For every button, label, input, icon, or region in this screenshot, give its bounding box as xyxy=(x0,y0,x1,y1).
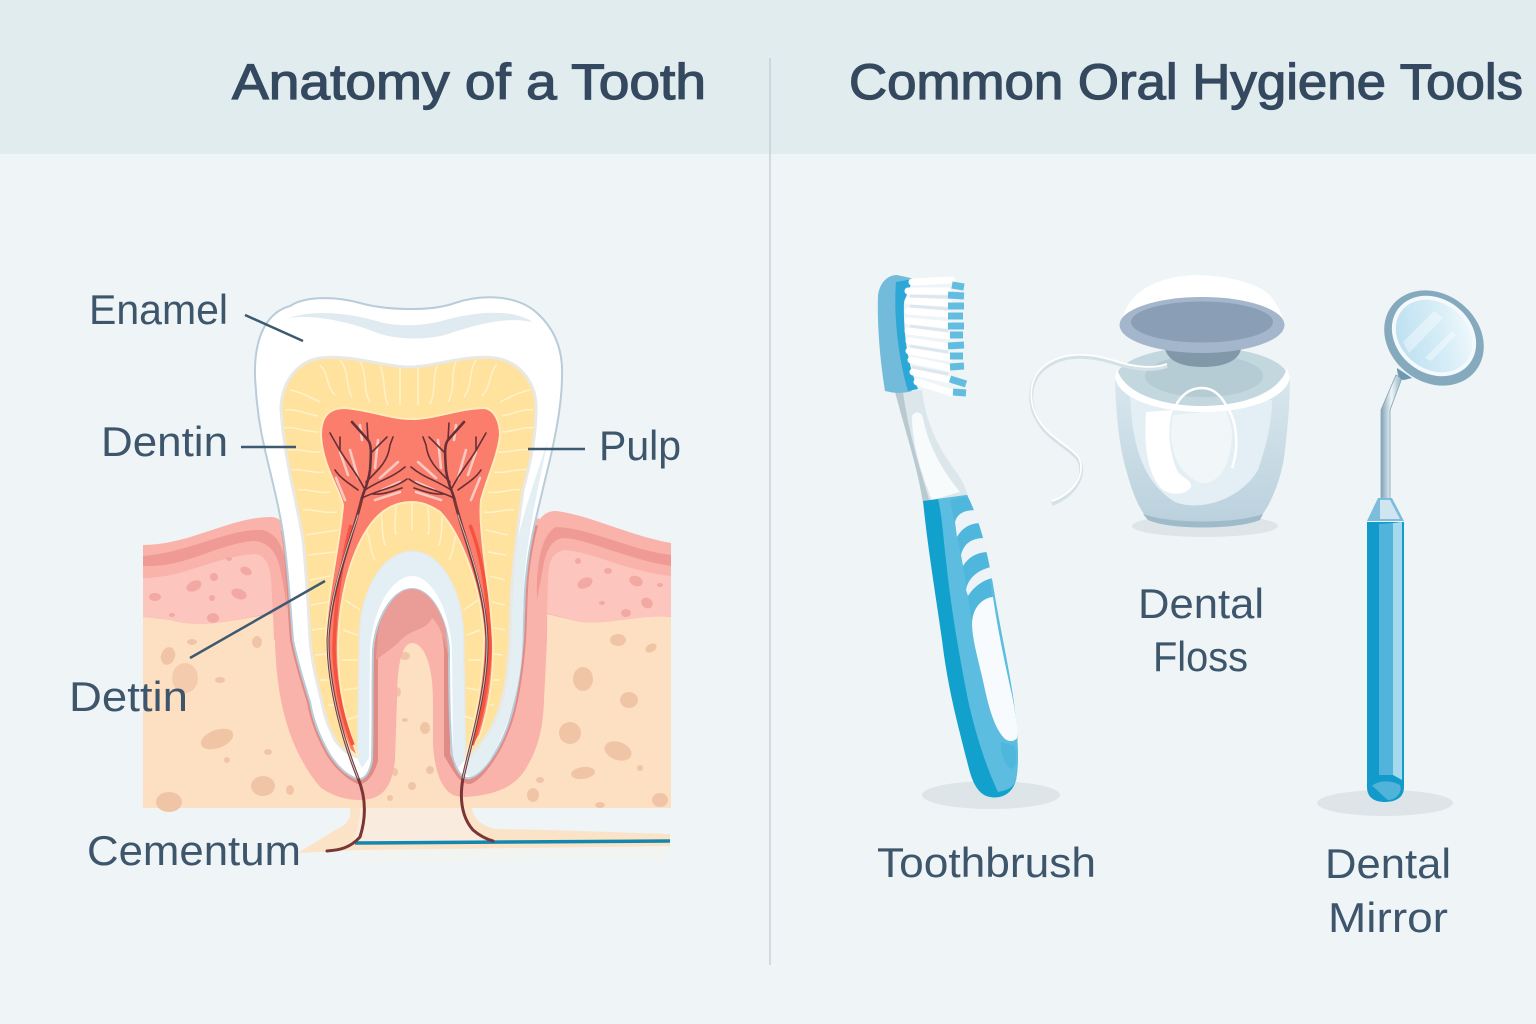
floss shadow xyxy=(1132,515,1278,537)
mirror reflections xyxy=(1403,311,1456,361)
bone xyxy=(143,610,671,812)
toothbrush neck highlight xyxy=(912,412,960,500)
mirror handle highlight xyxy=(1379,523,1393,775)
enamel xyxy=(255,297,562,779)
mirror joint xyxy=(1397,368,1412,380)
nerve tree right xyxy=(409,422,486,500)
floss cup base xyxy=(1143,514,1263,528)
mirror collar xyxy=(1367,498,1404,521)
mirror collar highlight xyxy=(1380,500,1400,519)
mirror handle strip xyxy=(1393,522,1402,780)
mirror stem xyxy=(1381,375,1402,500)
tooth anatomy diagram xyxy=(143,297,671,862)
floss string xyxy=(1031,355,1167,504)
icon: toothbrush xyxy=(878,275,1060,809)
floss spool window xyxy=(1171,410,1232,483)
nerve tree left xyxy=(330,422,407,500)
mirror shadow xyxy=(1317,790,1453,816)
light arch between roots xyxy=(358,552,465,768)
gum band left xyxy=(143,530,287,610)
mirror handle xyxy=(1367,522,1404,802)
leader line: Enamel xyxy=(245,315,303,341)
floss rim xyxy=(1115,368,1290,412)
toothbrush stripes xyxy=(955,510,993,596)
floss rim interior xyxy=(1116,347,1288,409)
nerve right xyxy=(454,498,493,841)
toothbrush shadow xyxy=(922,781,1060,809)
label: Cementum: Cementum xyxy=(87,827,301,874)
gum socket around roots xyxy=(268,500,548,800)
gum spots xyxy=(149,557,663,623)
toothbrush head xyxy=(878,275,915,393)
septum gum shading xyxy=(376,589,449,660)
mirror handle tip xyxy=(1372,781,1401,800)
dentin tubules xyxy=(284,360,533,720)
toothbrush white panel xyxy=(972,597,1017,741)
toothbrush handle grip xyxy=(950,496,992,625)
label: Dental Floss xyxy=(1138,580,1264,680)
mirror glass rim xyxy=(1376,279,1492,393)
toothbrush thumb grip xyxy=(1001,742,1016,769)
label: Enamel: Enamel xyxy=(89,286,228,333)
gum left xyxy=(143,517,292,640)
floss lid dome xyxy=(1122,275,1284,322)
floss connector xyxy=(1165,348,1241,367)
heading: Common Oral Hygiene Tools: Common Oral Hygiene Tools xyxy=(849,54,1523,110)
gum inner light right xyxy=(547,550,671,623)
leader line: Pulp xyxy=(528,448,585,450)
label: Dental Mirror: Mirror xyxy=(1328,894,1448,941)
gum inner light left xyxy=(143,554,273,624)
gum right xyxy=(528,511,671,640)
heading: Anatomy of a Tooth: Anatomy of a Tooth xyxy=(232,54,706,110)
label: Pulp: Pulp xyxy=(599,422,681,469)
label: Toothbrush: Toothbrush xyxy=(877,839,1096,886)
label: Dental Mirror xyxy=(1325,840,1451,941)
gum band right xyxy=(537,527,671,600)
nerve left xyxy=(327,498,364,851)
toothbrush head inner xyxy=(895,279,918,391)
dentin xyxy=(281,357,536,757)
jaw base below the bone xyxy=(298,808,670,862)
label: Dental Mirror: Dental xyxy=(1325,840,1451,887)
floss lid xyxy=(1120,297,1284,353)
icon: dental mirror xyxy=(1317,271,1503,816)
mirror glass xyxy=(1381,285,1487,387)
label: Dental Floss: Dental xyxy=(1138,580,1264,627)
pulp xyxy=(321,408,500,757)
socket inner edge xyxy=(284,525,535,781)
mirror head xyxy=(1365,271,1503,405)
toothbrush handle light side xyxy=(938,495,1018,792)
toothbrush neck shade xyxy=(895,392,930,503)
toothbrush neck xyxy=(895,390,968,503)
leader line: Dettin xyxy=(190,581,325,658)
floss spool xyxy=(1145,355,1263,397)
icon: dental floss container xyxy=(1031,275,1290,537)
floss cup inner light xyxy=(1130,395,1272,505)
floss loop xyxy=(1175,388,1236,468)
floss cup xyxy=(1115,378,1290,525)
label: Dentin: Dentin xyxy=(101,418,228,465)
toothbrush handle xyxy=(923,495,1018,797)
floss cup highlight xyxy=(1145,410,1191,494)
label: Dental Floss: Floss xyxy=(1153,633,1248,680)
label: Dettin: Dettin xyxy=(69,673,188,720)
floss lid inner xyxy=(1131,302,1273,342)
leader line: Dentin xyxy=(241,446,296,448)
toothbrush bristles xyxy=(908,280,966,393)
